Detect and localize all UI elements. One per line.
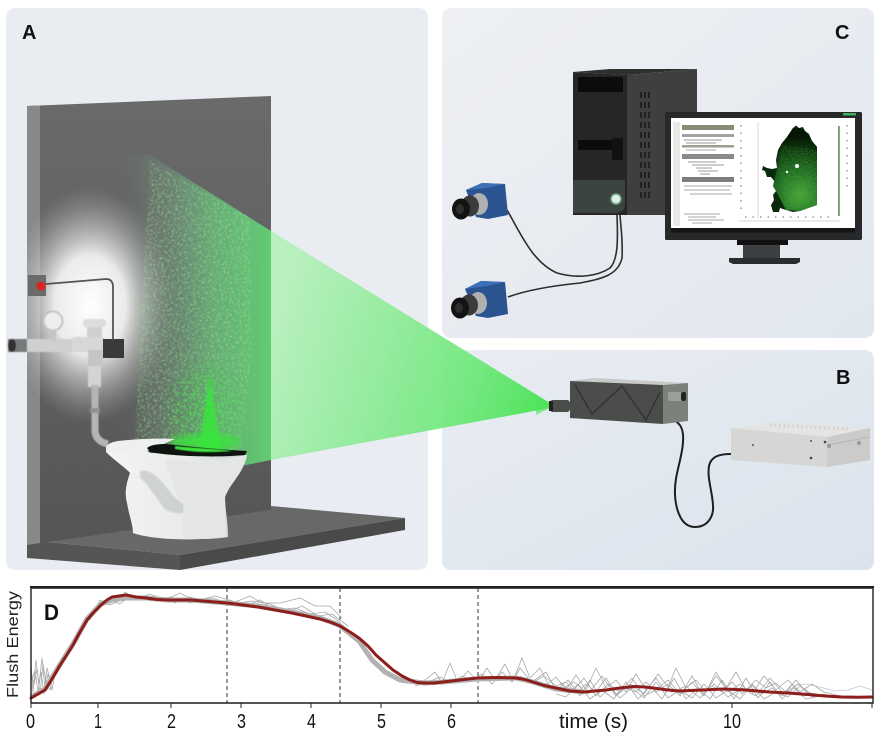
bowl body [106,452,247,539]
green particle map [762,126,817,212]
power supply box [731,422,870,467]
black toilet seat [147,444,247,456]
pressure gauge, valve and pipework [8,312,108,444]
x axis labels: 4 [307,711,316,733]
green beam nozzle glow [536,395,550,415]
panel: A toilet and laser sheet [0,8,428,580]
mean curve [31,595,872,698]
x axis labels: time (s) [559,711,628,733]
chart D: flush energy over time [5,587,874,733]
camera cables [507,210,622,297]
x axis labels: 3 [237,711,246,733]
software window: map axes [739,122,840,221]
laser cable [667,419,731,527]
panel: B laser and power supply [442,350,874,570]
x axis labels: 5 [377,711,386,733]
camera 2 [451,281,508,318]
red indicator box [28,275,46,296]
grey band of traces near mean [31,598,584,697]
x axis labels: 2 [167,711,176,733]
floor slab [27,506,405,570]
y axis label: Flush Energy [5,591,22,698]
x axis labels: 6 [447,711,456,733]
aerosol plume particles [135,160,252,468]
x axis labels: 1 [94,711,102,733]
software window: settings column [673,122,734,226]
x axis labels: 10 [723,711,741,733]
camera 1 [452,183,508,220]
monitor [665,112,862,264]
rim [106,439,175,461]
chart frame [31,588,873,703]
dashed time markers [227,588,478,703]
pale outlier trace [790,684,872,691]
green laser sheet [120,155,550,470]
laser head [549,378,688,424]
x axis ticks [31,703,872,708]
label D: D [44,600,59,625]
sensor wire [46,279,113,340]
label B: B [836,367,850,389]
x axis labels: 0 [26,711,35,733]
computer tower [573,69,697,215]
grey replicate traces [31,592,872,699]
panel labels [22,22,850,389]
panel: C cameras and computer [442,8,874,338]
colour bar [838,126,840,216]
wall [27,96,271,545]
toilet [106,439,247,539]
trap shading [140,470,183,513]
label C: C [835,22,849,44]
solenoid box [103,339,124,358]
x axis labels [26,711,741,733]
label A: A [22,22,36,44]
